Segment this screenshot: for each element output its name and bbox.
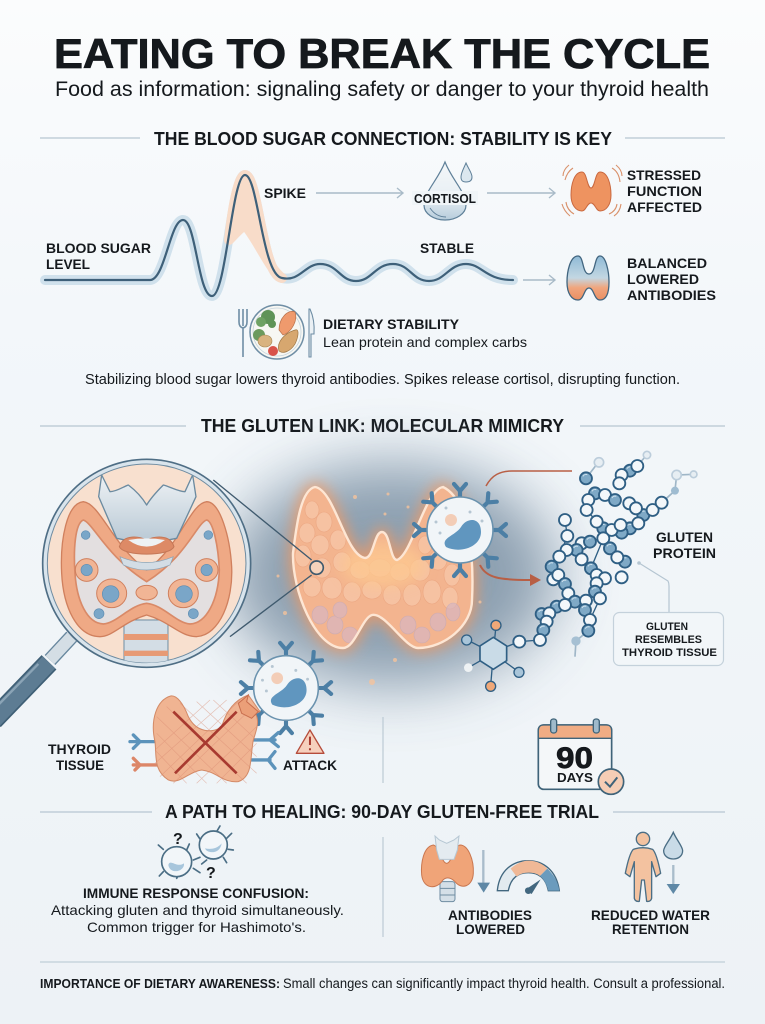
icon: cortisol drop: CORTISOL xyxy=(414,192,476,206)
label: gluten protein xyxy=(653,529,716,561)
text: antibodies lowered xyxy=(448,907,532,937)
label: thyroid tissue xyxy=(48,742,111,773)
section heading: path to healing: A PATH TO HEALING: 90-DAY GLUTEN-FREE TRIAL xyxy=(165,802,599,822)
text: reduced water retention: REDUCED WATER xyxy=(591,907,710,923)
footer note: Small changes can significantly impact thyroid health. Consult a professional. xyxy=(283,976,725,991)
icon: plate with fork and knife xyxy=(239,305,314,359)
text: immune response confusion xyxy=(51,885,344,935)
label: stable: STABLE xyxy=(420,241,474,256)
label: spike: SPIKE xyxy=(264,186,306,201)
icon: person with water drop xyxy=(625,832,683,901)
title: EATING TO BREAK THE CYCLE xyxy=(54,30,710,77)
text: blood sugar summary: Stabilizing blood sugar lowers thyroid antibodies. Spikes release cortisol, disrupting function. xyxy=(85,372,680,388)
text: reduced water retention xyxy=(591,907,710,937)
arrow: cell to gluten upper xyxy=(486,471,572,486)
section heading: gluten link: THE GLUTEN LINK: MOLECULAR MIMICRY xyxy=(201,416,564,436)
text: 90 days: 90 xyxy=(556,742,593,775)
icon: question marks xyxy=(173,831,216,882)
label: attack: ATTACK xyxy=(283,758,337,773)
callout: gluten resembles thyroid tissue xyxy=(614,561,724,666)
text: stressed function affected: AFFECTED xyxy=(627,199,702,215)
arrow: stable to balanced xyxy=(523,275,555,285)
icon: attacking immune cell xyxy=(241,643,331,733)
text: dietary stability xyxy=(323,316,527,350)
callout: gluten resembles thyroid tissue: RESEMBLES xyxy=(635,634,702,646)
text: stressed function affected: FUNCTION xyxy=(627,183,702,199)
illustration: damaged thyroid tissue xyxy=(130,695,324,783)
text: balanced lowered antibodies xyxy=(627,255,716,303)
text: immune response confusion: Common trigger for Hashimoto's. xyxy=(87,919,306,935)
text: 90 days: DAYS xyxy=(557,770,593,785)
label: blood sugar level xyxy=(46,241,151,272)
text: balanced lowered antibodies: ANTIBODIES xyxy=(627,287,716,303)
icon: immune cell near thyroid xyxy=(414,484,506,576)
chart: blood sugar curve xyxy=(45,175,513,296)
text: 90 days xyxy=(556,742,593,785)
icon: cortisol drop xyxy=(412,162,478,220)
arrow: spike to cortisol xyxy=(316,188,403,198)
illustration: glowing thyroid xyxy=(276,487,482,685)
text: antibodies lowered: LOWERED xyxy=(456,921,525,937)
text: dietary stability: DIETARY STABILITY xyxy=(323,316,460,332)
icon: confused immune cells xyxy=(158,826,233,878)
text: reduced water retention: RETENTION xyxy=(612,921,689,937)
icon: balanced thyroid xyxy=(567,256,609,300)
label: blood sugar level: BLOOD SUGAR xyxy=(46,241,151,256)
section heading: blood sugar: THE BLOOD SUGAR CONNECTION: STABILITY IS KEY xyxy=(154,129,612,149)
background glow behind thyroid xyxy=(227,463,557,687)
text: dietary stability: Lean protein and complex carbs xyxy=(323,334,527,350)
divider xyxy=(382,717,384,937)
text: immune response confusion: IMMUNE RESPONSE CONFUSION: xyxy=(83,885,309,901)
label: gluten protein: PROTEIN xyxy=(653,545,716,561)
label: thyroid tissue: TISSUE xyxy=(56,758,104,773)
text: antibodies lowered: ANTIBODIES xyxy=(448,907,532,923)
icon: thyroid with down arrow and gauge xyxy=(421,836,559,902)
icon: question marks: ? xyxy=(173,831,183,848)
icon: stressed thyroid xyxy=(562,165,622,216)
label: thyroid tissue: THYROID xyxy=(48,742,111,757)
icon: 90 days calendar xyxy=(538,719,624,794)
arrow: cell to gluten lower xyxy=(480,565,541,586)
label: blood sugar level: LEVEL xyxy=(46,257,90,272)
text: stressed function affected xyxy=(627,167,702,215)
arrow: cortisol to stressed xyxy=(487,188,555,198)
label: gluten protein: GLUTEN xyxy=(656,529,713,545)
footer note xyxy=(40,962,725,991)
callout: gluten resembles thyroid tissue: GLUTEN xyxy=(646,621,688,633)
text: balanced lowered antibodies: LOWERED xyxy=(627,271,699,287)
subtitle: Food as information: signaling safety or danger to your thyroid health xyxy=(55,78,709,101)
footer note: IMPORTANCE OF DIETARY AWARENESS: xyxy=(40,976,280,991)
icon: magnifying glass with thyroid cross-section xyxy=(0,459,323,720)
text: immune response confusion: Attacking gluten and thyroid simultaneously. xyxy=(51,902,344,918)
text: balanced lowered antibodies: BALANCED xyxy=(627,255,707,271)
icon: question marks: ? xyxy=(206,865,216,882)
text: stressed function affected: STRESSED xyxy=(627,167,701,183)
illustration: gluten protein molecule xyxy=(462,451,697,691)
callout: gluten resembles thyroid tissue: THYROID TISSUE xyxy=(622,647,717,659)
